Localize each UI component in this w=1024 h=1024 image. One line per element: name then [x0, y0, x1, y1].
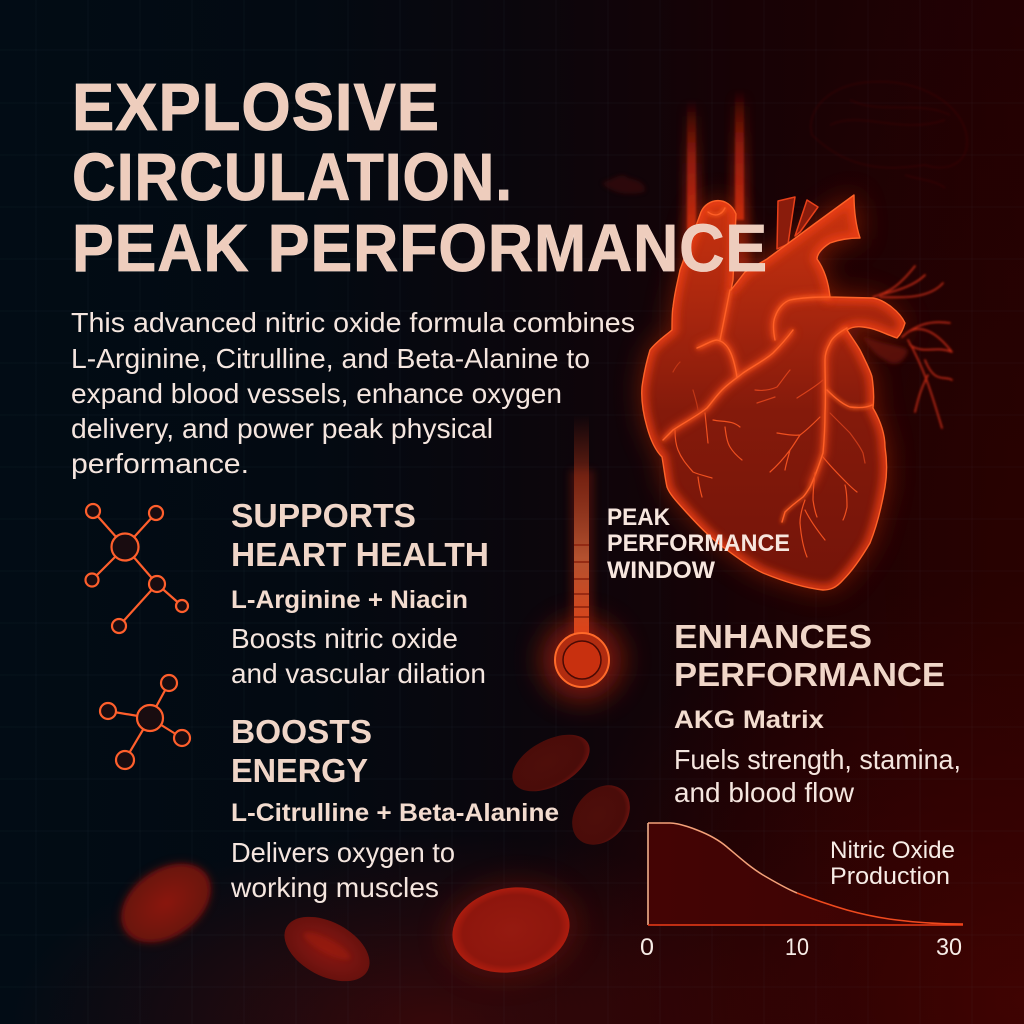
- panel: boosts energy: working muscles: [230, 872, 439, 903]
- area chart: nitric oxide production: [640, 823, 963, 961]
- panel: enhances performance: Fuels strength, stamina,: [674, 744, 961, 775]
- panel: enhances performance: ENHANCES: [674, 618, 872, 655]
- heart glow beams: [682, 90, 750, 290]
- icon: molecule two: [100, 675, 190, 769]
- title: [72, 70, 768, 286]
- intro text block: L-Arginine, Citrulline, and Beta-Alanine to: [71, 343, 590, 374]
- thermometer gauge: [542, 415, 622, 700]
- panel: supports heart health: and vascular dilation: [231, 658, 486, 689]
- panel: supports heart health: SUPPORTS: [231, 497, 416, 534]
- panel: boosts energy: L-Citrulline + Beta-Alanine: [231, 799, 559, 827]
- illustration: heart: [642, 195, 952, 590]
- chart title: Production: [830, 863, 950, 890]
- chart axis labels: 30: [936, 934, 962, 961]
- gauge label: [607, 504, 790, 584]
- panel: enhances performance: [674, 618, 961, 808]
- intro text block: performance.: [71, 448, 249, 479]
- intro text block: [71, 307, 635, 479]
- blood cell: lower middle: [274, 904, 380, 994]
- title: EXPLOSIVE: [72, 70, 440, 145]
- blood cell: small left: [103, 844, 229, 962]
- chart title: [830, 837, 955, 890]
- panel: boosts energy: Delivers oxygen to: [231, 837, 455, 868]
- panel: boosts energy: [230, 713, 559, 903]
- right side vessels: [873, 266, 952, 428]
- panel: enhances performance: and blood flow: [674, 777, 855, 808]
- icon: molecule one: [86, 504, 188, 633]
- panel: enhances performance: AKG Matrix: [674, 706, 824, 734]
- panel: enhances performance: PERFORMANCE: [674, 656, 945, 693]
- chart axis labels: [640, 934, 962, 961]
- heart outer glow: [642, 195, 905, 590]
- chart axis labels: 10: [785, 934, 809, 961]
- panel: boosts energy: ENERGY: [231, 752, 368, 789]
- panel: supports heart health: [231, 497, 489, 689]
- panel: supports heart health: Boosts nitric oxide: [231, 623, 458, 654]
- heart highlights: [663, 208, 872, 522]
- icon: faint blood splatter: [602, 175, 645, 194]
- intro text block: This advanced nitric oxide formula combines: [71, 307, 635, 338]
- panel: supports heart health: L-Arginine + Niacin: [231, 586, 468, 614]
- blood cell: large bright: [436, 871, 586, 989]
- chart axis labels: 0: [640, 934, 654, 961]
- title: CIRCULATION.: [72, 140, 513, 215]
- heart inner glow: [642, 195, 905, 590]
- gauge label: PEAK: [607, 504, 671, 531]
- intro text block: delivery, and power peak physical: [71, 413, 493, 444]
- icon: faint brain: [811, 82, 967, 188]
- coronary branches: [673, 362, 865, 557]
- blood cell: dim upper: [503, 723, 599, 803]
- chart title: Nitric Oxide: [830, 837, 955, 864]
- small vessels on top of the heart: [777, 197, 818, 249]
- blurred vessel behind: [862, 336, 908, 364]
- title: PEAK PERFORMANCE: [72, 211, 768, 286]
- gauge label: PERFORMANCE: [607, 530, 790, 557]
- panel: supports heart health: HEART HEALTH: [231, 536, 489, 573]
- heart rim: [642, 195, 905, 590]
- panel: boosts energy: BOOSTS: [231, 713, 372, 750]
- heart body: [642, 195, 905, 590]
- blood cell: dim right: [560, 774, 642, 856]
- intro text block: expand blood vessels, enhance oxygen: [71, 378, 562, 409]
- gauge label: WINDOW: [607, 557, 715, 584]
